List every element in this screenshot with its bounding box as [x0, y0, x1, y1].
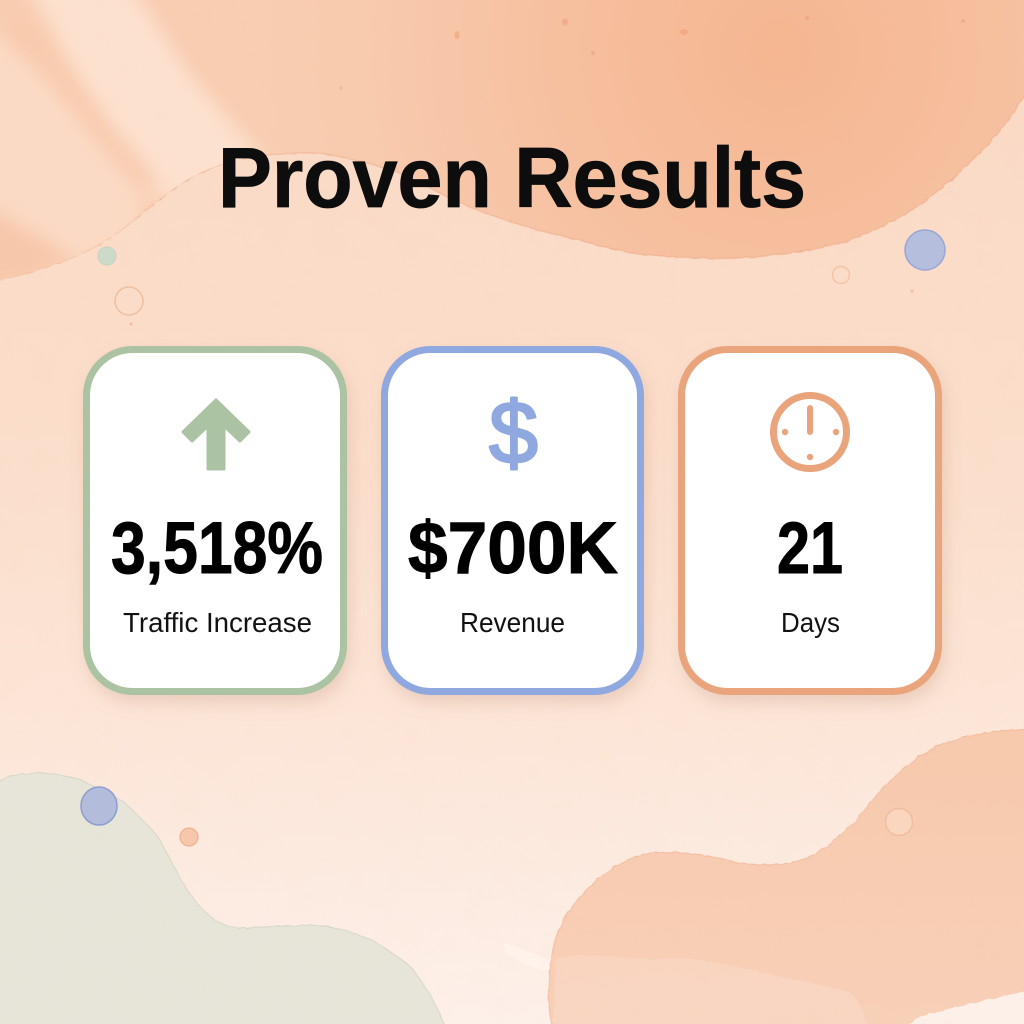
dark ray: top left — [25, 50, 156, 188]
title: Proven Results — [218, 131, 806, 226]
icon: dollar sign: $ — [489, 383, 538, 482]
stat: $700K: $700K — [408, 508, 618, 589]
decorative dot: orange bottom left — [180, 828, 198, 846]
peach wash: far left — [0, 32, 150, 280]
label: revenue: Revenue — [460, 607, 565, 638]
light patch: bottom right wash — [553, 955, 869, 1024]
watercolor blob: bottom left green — [0, 773, 452, 1024]
decorative dot: orange left — [115, 287, 143, 315]
decorative dot: blue bottom left — [81, 787, 117, 825]
panel: days — [682, 350, 938, 692]
icon: up arrow — [183, 400, 249, 469]
stat: 21: 21 — [777, 508, 843, 589]
panel: traffic increase — [86, 350, 344, 692]
watercolor blob: bottom right orange — [548, 730, 1024, 1024]
paint specks — [130, 16, 965, 326]
light band: top left ray — [20, 0, 265, 205]
panel: revenue — [384, 350, 640, 692]
dark corner: left edge — [0, 209, 72, 280]
light patch: bottom right corner — [895, 988, 1024, 1024]
stat: 3,518%: 3,518% — [111, 508, 323, 589]
label: traffic increase: Traffic Increase — [123, 607, 312, 638]
decorative dot: orange small top right — [832, 266, 850, 284]
decorative dot: blue top right — [905, 230, 945, 270]
decorative dot: green left — [98, 247, 116, 265]
card frame: orange — [682, 350, 938, 692]
card frame: blue — [384, 350, 640, 692]
watercolor blob: top — [0, 0, 1024, 284]
icon: clock — [774, 396, 846, 468]
decorative dot: orange ring bottom right — [886, 808, 912, 836]
pale splash: bottom centre — [503, 942, 552, 972]
card frame: green — [86, 350, 344, 692]
label: days: Days — [781, 607, 840, 638]
top left light washes — [0, 0, 265, 300]
